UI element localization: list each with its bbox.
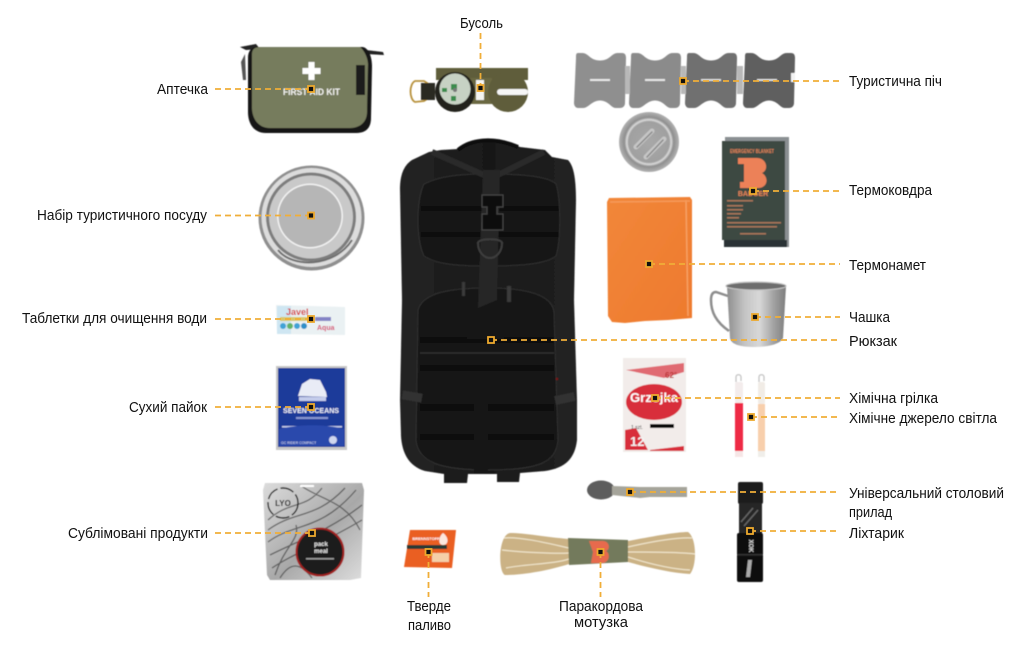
top handle [458,140,518,150]
label: thermal tent: Термонамет [849,258,926,274]
icon: chemical heat pack: 12 [630,434,644,449]
label: paracord rope: Паракордова [559,599,644,615]
icon: freeze-dried food pouch: pack [314,542,328,548]
label: backpack: Рюкзак [849,334,898,350]
label: camping stove: Туристична піч [849,74,942,90]
icon: metal disc [619,112,679,172]
label: solid fuel: паливо [408,618,451,634]
icon: water tablets: Aqua [317,325,335,332]
label: paracord rope [559,599,644,631]
icon: steel cup [711,282,786,347]
icon: solid fuel box: BRENNSTOFF [412,536,440,541]
panel: backpack [400,140,577,483]
label: cup: Чашка [849,310,891,326]
icon: solid fuel box [404,530,456,568]
icon: glow sticks [735,375,765,457]
label: thermal blanket: Термоковдра [849,183,933,199]
label: solid fuel: Тверде [407,599,451,615]
icon: water tablets: Javel [286,307,309,317]
icon: dry ration: GC RIDER COMPACT [281,441,317,445]
icon: freeze-dried food pouch: LYO [275,499,291,508]
buckle [482,195,503,230]
icon: emergency blanket: BADGER [738,191,768,198]
icon: chemical heat pack: 62° [665,371,677,380]
icon: freeze-dried food pouch [263,483,364,580]
icon: dry ration: SEVEN OCEANS [283,406,339,415]
label: universal cutlery [849,486,1004,521]
icon: emergency blanket: EMERGENCY BLANKET [730,149,774,155]
label: chemical light: Хімічне джерело світла [849,411,998,427]
icon: stove panels [574,53,795,108]
label: chemical warmer: Хімічна грілка [849,391,939,407]
label: dry ration: Сухий пайок [129,400,208,416]
icon: water tablets [276,305,345,335]
side straps [401,390,423,403]
label: first aid kit: Аптечка [157,82,209,98]
panel: first aid kit: FIRST AID KIT [283,87,340,97]
callout lines and markers [215,33,840,597]
label: compass: Бусоль [460,16,503,32]
icon: chemical heat pack [623,358,686,452]
label: water tablets: Таблетки для очищення води [22,311,207,327]
label: paracord rope: мотузка [574,615,629,631]
icon: flashlight: XOK [747,539,753,553]
label: flashlight: Ліхтарик [849,526,905,542]
icon: steel plate [258,166,364,270]
top pocket [418,174,560,266]
panel: compass [410,68,528,112]
lower pocket [416,288,558,470]
icon: orange poncho [607,197,692,323]
v straps [432,152,544,176]
icon: chemical heat pack: 1 szt. [631,425,643,431]
icon: freeze-dried food pouch: meal [314,549,328,555]
icon: flashlight [737,482,763,582]
label: universal cutlery: прилад [849,505,892,521]
label: solid fuel [407,599,451,634]
label: universal cutlery: Універсальний столовий [849,486,1004,502]
label: freeze-dried food: Сублімовані продукти [68,526,208,542]
icon: multi-tool cutlery [587,480,687,500]
panel: first aid kit [240,44,384,133]
icon: emergency blanket [722,137,789,247]
label: camping cookware: Набір туристичного посуду [37,208,208,224]
icon: dry ration [276,366,347,450]
icon: chemical heat pack: Grzojka [630,390,679,405]
icon: paracord [500,532,695,575]
